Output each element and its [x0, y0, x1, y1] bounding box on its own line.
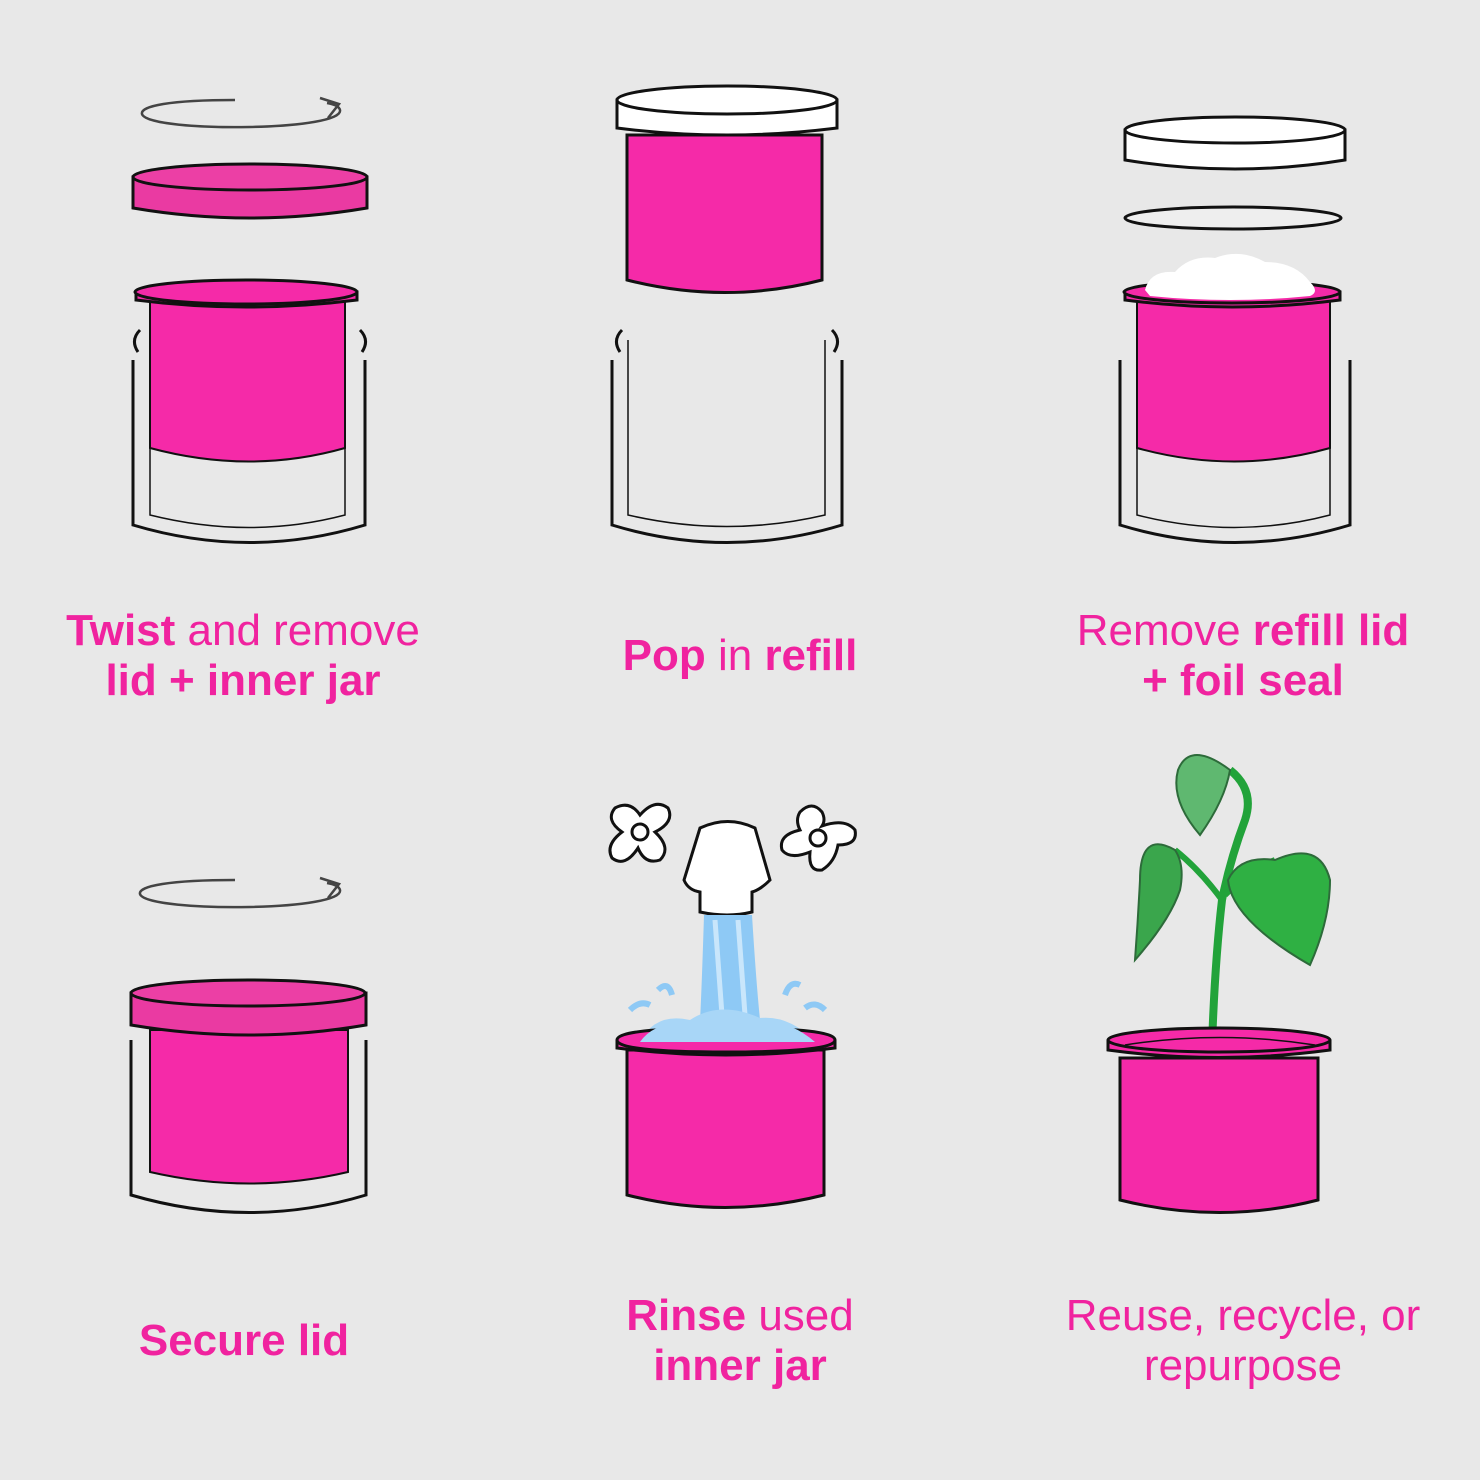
text: step 3 caption — [1077, 606, 1409, 705]
icon: water stream — [630, 915, 825, 1042]
text: step 3 caption: Remove refill lid — [1077, 606, 1409, 655]
text: step 5 caption — [626, 1291, 854, 1390]
icon: refill cup with cream — [1120, 254, 1350, 543]
text: step 1 caption — [66, 606, 420, 705]
text: step 3 caption: + foil seal — [1142, 656, 1344, 705]
text: step 4 caption: Secure lid — [139, 1316, 349, 1365]
text: step 6 caption: Reuse, recycle, or — [1066, 1291, 1420, 1340]
panel: step 1 twist and remove — [133, 98, 367, 542]
icon: jar with inner jar — [133, 280, 366, 542]
icon: empty outer jar — [612, 330, 842, 542]
text: step 1 caption: lid + inner jar — [105, 656, 381, 705]
icon: pink inner jar — [617, 1016, 835, 1208]
text: step 6 caption: repurpose — [1144, 1341, 1342, 1390]
icon: plant — [1135, 755, 1330, 1045]
panel: step 5 rinse — [610, 804, 855, 1208]
icon: tap handle left — [610, 804, 670, 861]
icon: refill cup with white lid — [617, 86, 837, 292]
text: step 5 caption: Rinse used — [626, 1291, 854, 1340]
text: step 1 caption: Twist and remove — [66, 606, 420, 655]
icon: white lid — [1125, 117, 1345, 169]
icon: faucet — [684, 822, 770, 915]
panel: step 2 pop in refill — [612, 86, 842, 542]
icon: closed jar — [131, 980, 366, 1212]
panel: step 3 remove refill lid + foil seal — [1120, 117, 1350, 542]
text: step 5 caption: inner jar — [653, 1341, 827, 1390]
text: step 2 caption: Pop in refill — [623, 631, 857, 680]
icon: foil seal — [1125, 207, 1341, 229]
text: step 6 caption — [1066, 1291, 1420, 1390]
icon: tap handle right — [781, 806, 855, 870]
icon: rotation arrow — [140, 878, 340, 907]
icon: pink lid — [133, 164, 367, 218]
icon: pink pot — [1108, 1028, 1330, 1212]
icon: rotation arrow — [142, 98, 340, 127]
panel: step 6 reuse — [1108, 755, 1330, 1212]
panel: step 4 secure lid — [131, 878, 366, 1212]
